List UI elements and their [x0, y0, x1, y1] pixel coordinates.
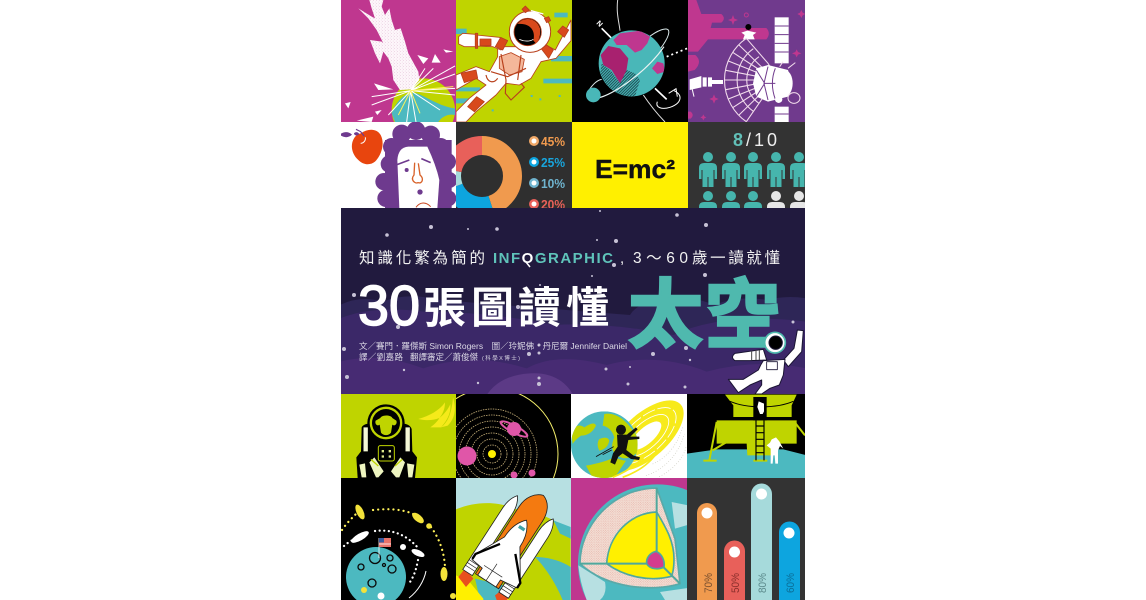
moon: [586, 88, 601, 102]
shuttle: [463, 481, 567, 600]
apple: [352, 130, 383, 164]
yellow swirl: [597, 388, 695, 483]
planet: [392, 78, 455, 122]
standing astronaut: [767, 437, 783, 464]
chest panel: [378, 446, 394, 461]
clouds far: [340, 296, 807, 395]
yellow spacecraft: [353, 503, 456, 599]
astronaut body: [456, 6, 571, 122]
chimp face: [375, 415, 397, 435]
title: 30 charts: 30: [358, 274, 420, 338]
helmet: [765, 332, 785, 353]
credits: 翻譯審定／蕭俊傑: [410, 352, 478, 362]
title: space: 太空: [628, 273, 780, 357]
bar 50%: 50%: [730, 573, 742, 593]
outer ring: [426, 388, 558, 520]
earth: [571, 411, 638, 478]
surface: [578, 484, 737, 600]
helmet lugs: [522, 6, 551, 23]
flag: [379, 538, 391, 558]
bar 70%: 70%: [703, 573, 715, 593]
runner astronaut: [596, 425, 640, 465]
external tank: [475, 488, 555, 589]
banana streaks: [418, 397, 455, 427]
panel: earth and orbit: [572, 0, 688, 122]
ring back: [650, 28, 670, 48]
legend 45%: 45%: [541, 135, 565, 149]
fraction label: 8/10: [733, 130, 777, 150]
hair: [375, 121, 457, 210]
legend 10%: 10%: [541, 177, 565, 191]
orbits: [447, 409, 537, 499]
debris: [345, 49, 453, 122]
impact rays: [372, 66, 455, 122]
band: title banner: [340, 208, 807, 395]
flames: [456, 575, 510, 600]
bar 80%: 80%: [757, 573, 769, 593]
lower swirl over earth: [613, 451, 658, 477]
comet flame: [358, 0, 419, 90]
rotation arrow: [657, 89, 680, 108]
panel: Newton with apple: [340, 121, 457, 210]
subtitle: INFOGRAPHIC: [493, 250, 613, 267]
land: [456, 503, 571, 600]
orbit line: [617, 0, 665, 122]
glove: [459, 33, 475, 47]
background streaks: [456, 13, 572, 103]
panel: E=mc2: [572, 122, 688, 208]
sun: [488, 450, 496, 458]
wedge lines: [580, 488, 680, 584]
descent stage: [717, 420, 797, 455]
panel: comet striking planet: [341, 0, 456, 122]
face: [397, 147, 439, 208]
booster nozzles: [465, 560, 514, 595]
subtitle: [359, 248, 780, 267]
leaf: [340, 132, 359, 137]
inner core: [647, 551, 664, 569]
dotted signal: [667, 48, 687, 57]
panel: floating astronaut: [456, 0, 572, 122]
subtitle: 歲一讀就懂: [692, 249, 780, 267]
tiny stars: [492, 95, 561, 111]
saturn: [499, 419, 529, 439]
tiny figure on dish: [741, 24, 756, 39]
white spacecraft: [350, 529, 426, 600]
credits: 譯／劉嘉路: [359, 352, 403, 362]
panel: lunar lander: [687, 394, 807, 479]
globe: [598, 30, 665, 97]
donut: [452, 146, 512, 206]
north label: N: [595, 19, 605, 29]
suit: [356, 423, 417, 478]
mantle: [607, 512, 674, 579]
helmet: [367, 404, 405, 442]
people row 1: [699, 152, 808, 187]
panel: space shuttle: [456, 478, 571, 600]
orange patches: [461, 26, 569, 112]
chest box: [767, 362, 777, 370]
panel: astronaut and swirl: [571, 388, 695, 483]
panel: solar system: [426, 388, 571, 520]
stars: [700, 10, 805, 120]
satellite body: [753, 65, 792, 102]
stars: [342, 210, 794, 388]
orbit arc: [409, 571, 426, 598]
solar panels: [775, 17, 789, 63]
bar 60%: 60%: [785, 573, 797, 593]
subtitle: 知識化繁為簡的: [359, 248, 485, 267]
astronaut in banner: [728, 330, 803, 394]
clouds mid: [340, 309, 807, 395]
credits: [359, 341, 627, 362]
people row 2: [699, 191, 808, 226]
craters: [358, 552, 396, 587]
title: 30 charts: [358, 274, 609, 338]
dish mesh: [724, 38, 772, 122]
hatch and ladder: [753, 397, 767, 420]
panel: moon orbit: [341, 478, 456, 600]
legend 25%: 25%: [541, 156, 565, 170]
moon surface: [687, 449, 807, 479]
torso and legs: [728, 359, 785, 394]
antenna feed: [690, 76, 723, 90]
lander upper stage: [725, 395, 797, 417]
boosters: [463, 493, 522, 576]
pink planets: [458, 446, 536, 478]
axis: [602, 28, 667, 99]
orbiter: [467, 507, 551, 597]
title: 30 charts: 張圖讀懂: [423, 285, 609, 333]
moon: [346, 547, 406, 600]
arm: [478, 34, 502, 50]
subtitle: ,: [620, 250, 624, 267]
chest pack: [499, 53, 524, 75]
subtitle: 3～60: [633, 250, 688, 267]
credits: 文／賽門．羅傑斯 Simon Rogers 圖／玲妮佛．丹尼爾 Jennifer Daniel: [359, 341, 627, 351]
pink clouds: [688, 0, 769, 119]
crust: [580, 488, 680, 588]
dotted orbits: [342, 509, 445, 582]
panel: earth core: [571, 478, 737, 600]
legend 20%: 20%: [541, 198, 565, 212]
raised arm: [783, 330, 803, 367]
grey dots: [646, 427, 686, 477]
ring front: [597, 47, 664, 98]
panel: space chimp: [341, 394, 456, 478]
panel: radio dish: [688, 0, 805, 122]
clouds near: [340, 358, 807, 395]
helmet: [509, 11, 551, 52]
panel: donut chart: [452, 122, 572, 212]
left arm: [732, 349, 767, 361]
panel: 8 of 10 people: [688, 122, 808, 226]
legs: [703, 421, 805, 461]
limbs: [359, 457, 414, 477]
panel: pill bar chart: [687, 478, 805, 600]
credits: (科學X博士): [482, 354, 520, 362]
formula: E=mc²: [595, 154, 675, 184]
